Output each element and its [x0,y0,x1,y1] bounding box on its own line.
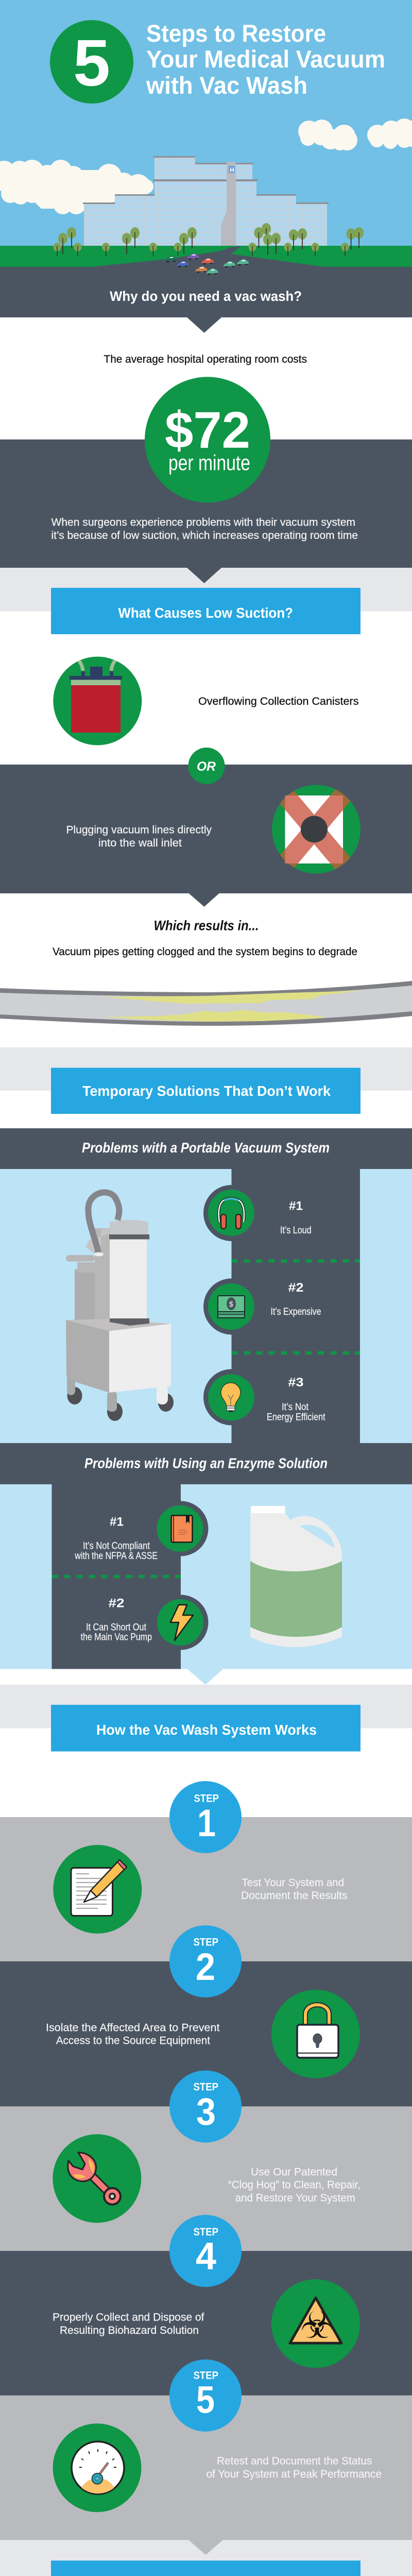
text: #1 loud: It’s Loud [280,1225,312,1236]
title: Your Medical Vacuum [146,45,385,73]
text: step 5: of Your System at Peak Performance [206,2468,382,2480]
step 3 badge: STEP [194,2081,218,2093]
road [91,246,324,267]
step 5 badge [169,2360,242,2432]
arrow [188,2540,223,2555]
text: #2 expensive: It’s Expensive [271,1307,321,1317]
text: #3 not efficient: Energy Efficient [267,1412,325,1423]
step 4 badge: STEP [194,2226,218,2238]
step 2 badge: STEP [194,1936,218,1948]
icon: headphones [208,1190,254,1236]
callout: $72 per minute [145,377,270,503]
heading: temporary solutions [51,1067,360,1114]
icon: gauge [53,2424,141,2514]
text: step 1: Document the Results [241,1890,347,1902]
text: #2 short out: It Can Short Out [86,1622,147,1633]
arrow [187,1669,224,1685]
step 2 badge: 2 [196,1945,215,1988]
illustration: enzyme jug [250,1506,342,1647]
text: canisters: Overflowing Collection Canisters [198,696,358,707]
text: step 5 [206,2455,382,2480]
icon: wrench [53,2134,141,2223]
icon: notepad and pencil [53,1845,142,1934]
icon: money: $ [229,1300,233,1308]
step 1 badge: 1 [197,1802,216,1844]
step 3 badge: 3 [196,2090,216,2133]
heading: temporary solutions: Temporary Solutions That Don’t Work [82,1083,331,1099]
illustration: portable vacuum [66,1192,174,1421]
text: step 2 [46,2022,220,2047]
text: #2 expensive: #2 [288,1281,304,1295]
text: #1 loud: #1 [289,1199,303,1213]
text: #3 not efficient: #3 [288,1376,304,1389]
text: #3 not efficient [267,1376,325,1423]
badge: OR [188,748,225,784]
text: #1 not compliant: #1 [110,1515,124,1529]
text: #3 not efficient: It’s Not [282,1402,309,1413]
step 1 badge: STEP [194,1793,219,1805]
hospital building: H [230,167,234,174]
text: average cost intro: The average hospital operating room costs [104,353,307,365]
title: with Vac Wash [146,72,307,99]
arrow [187,568,221,583]
hero scene: sky, clouds, hospital, trees, cars [0,0,412,275]
icon: lightning bolt [157,1599,203,1646]
title: Steps to Restore [146,20,326,47]
text: step 4: Properly Collect and Dispose of [53,2312,204,2324]
heading: what causes low suction: What Causes Low Suction? [118,605,293,621]
icon: money [208,1283,254,1330]
icon: light bulb [208,1375,254,1421]
callout: $72 per minute: per minute [168,450,250,475]
text: low suction explanation [52,516,358,541]
text: step 3: and Restore Your System [235,2192,355,2204]
step 5 badge: 5 [196,2379,215,2421]
heading: how it works [51,1705,360,1752]
icon: blocked wall inlet [272,781,360,878]
heading: enzyme solution: Problems with Using an Enzyme Solution [84,1455,328,1471]
step 2 badge [169,1925,242,1997]
text: step 1 [241,1877,347,1902]
arrow [188,893,219,907]
text: #2 short out: #2 [108,1596,125,1611]
text: step 2: Access to the Source Equipment [56,2035,210,2047]
text: low suction explanation: When surgeons experience problems with their vacuum system [52,516,355,529]
text: #2 short out: the Main Vac Pump [81,1632,152,1643]
icon: canister [53,656,142,745]
text: wall inlet: into the wall inlet [98,837,182,849]
text: wall inlet [66,824,212,849]
hospital building [83,156,329,246]
title badge: 5: 5 [73,26,110,100]
title badge: 5 [50,20,133,104]
icon: cars [165,253,249,275]
icon: padlock [271,1990,360,2078]
icon: biohazard [271,2279,360,2368]
heading: portable vacuum: Problems with a Portable Vacuum System [82,1140,330,1156]
step 4 badge [169,2215,242,2287]
callout: $72 per minute: $72 [165,401,250,459]
text: #2 expensive [271,1281,321,1317]
text: step 3: Use Our Patented [251,2166,337,2178]
panel: enzyme problems [52,1484,208,1669]
heading: what causes low suction [51,588,360,634]
text: step 3: “Clog Hog” to Clean, Repair, [228,2179,360,2191]
text: #1 not compliant [75,1515,158,1562]
title [146,20,385,99]
text: low suction explanation: it’s because of low suction, which increases operating room time [52,530,358,541]
text: step 4: Resulting Biohazard Solution [60,2325,199,2336]
text: wall inlet: Plugging vacuum lines directly [66,824,212,836]
panel: portable vacuum problems [203,1169,360,1443]
text: #1 not compliant: with the NFPA & ASSE [75,1551,158,1562]
text: clogged pipes: Vacuum pipes getting clogged and the system begins to degrade [53,946,357,958]
text: #2 short out [81,1596,152,1643]
text: step 4 [53,2312,204,2336]
step 5 badge: STEP [194,2370,218,2382]
heading: why vac wash: Why do you need a vac wash? [110,289,302,304]
step 4 badge: 4 [196,2234,216,2277]
text: step 2: Isolate the Affected Area to Prevent [46,2022,220,2033]
badge: OR: OR [197,759,216,774]
text: #1 not compliant: It’s Not Compliant [83,1541,150,1552]
heading: results [51,2561,360,2576]
icon: biohazard: ☣ [300,2303,334,2347]
step 1 badge [169,1781,242,1853]
icon: trees [54,223,364,256]
icon: book [157,1505,203,1552]
illustration: clogged pipe [0,981,412,1026]
heading: how it works: How the Vac Wash System Works [96,1722,317,1738]
heading: why vac wash [110,289,302,333]
text: which results in: Which results in... [153,918,259,934]
text: #1 loud [280,1199,312,1236]
icon: clouds [0,118,412,214]
text: step 1: Test Your System and [242,1877,344,1889]
text: step 3 [228,2166,360,2204]
step 3 badge [169,2071,242,2143]
text: step 5: Retest and Document the Status [217,2455,372,2467]
